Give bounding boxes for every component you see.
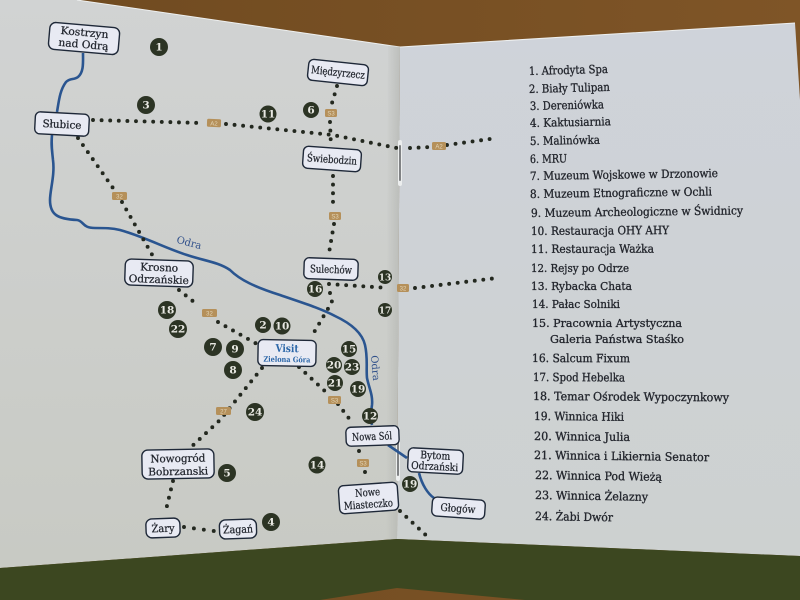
- point 22: 22: [171, 324, 185, 336]
- road 32 south: [179, 290, 257, 344]
- label Żagań: Żagań: [223, 521, 253, 537]
- label Visit Zielona Góra: Zielona Góra: [263, 355, 311, 364]
- point 9: 9: [231, 344, 239, 356]
- road badges: [112, 109, 446, 468]
- numbered points: [137, 38, 418, 531]
- road S3 middle: [329, 176, 334, 253]
- river Odra north: [57, 53, 83, 112]
- item 15 line 2: Galeria Państwa Staśko: [550, 332, 684, 346]
- label Nowe Miasteczko: Nowe: [355, 486, 381, 500]
- point 10: 10: [275, 320, 289, 332]
- badge 32 east: [397, 284, 409, 292]
- road Nowogród to Żary: [165, 481, 173, 514]
- item 8: 8. Muzeum Etnograficzne w Ochli: [530, 184, 712, 201]
- item 23: 23. Winnica Żelazny: [535, 488, 649, 504]
- item 10: 10. Restauracja OHY AHY: [531, 223, 669, 238]
- road A2 west: [93, 120, 202, 123]
- point 22: [169, 320, 187, 338]
- item 12: 12. Rejsy po Odrze: [531, 261, 629, 275]
- label Świebodzin: Świebodzin: [307, 150, 358, 168]
- item 9: 9. Muzeum Archeologiczne w Świdnicy: [531, 203, 743, 220]
- label Nowogród Bobrzański: Bobrzanski: [148, 465, 209, 479]
- label Bytom Odrzański: Bytom: [420, 449, 451, 463]
- road 27: [189, 368, 262, 449]
- point 23: 23: [345, 362, 359, 374]
- point 18: [158, 301, 176, 319]
- label Krosno Odrzańskie: Krosno: [140, 261, 178, 275]
- right page: [397, 23, 800, 556]
- road Żary to Żagań: [184, 527, 214, 531]
- road A2 east: [410, 139, 490, 148]
- badge 32 north: 32: [116, 194, 123, 200]
- point 11: [260, 106, 276, 122]
- label Bytom Odrzański: [407, 448, 464, 474]
- point 17: [378, 303, 392, 317]
- point 5: [218, 464, 236, 482]
- river Odra main: [50, 135, 372, 425]
- label Visit Zielona Góra: Visit: [275, 343, 299, 355]
- label Międzyrzecz: [307, 59, 369, 86]
- point 19: 19: [351, 384, 365, 396]
- badge S3 middle: [329, 212, 341, 220]
- road A2 centre: [226, 124, 397, 148]
- badge 32 south: [202, 309, 217, 318]
- point 6: 6: [307, 104, 315, 116]
- point 4: [262, 513, 280, 531]
- road S3 Nowa Sól to Nowe Miasteczko: [359, 451, 366, 480]
- green cover band: [0, 539, 800, 600]
- item 5: 5. Malinówka: [530, 133, 600, 148]
- left page: [0, 0, 400, 568]
- label Kostrzyn nad Odrą: Kostrzyn: [60, 25, 109, 41]
- badge S3 middle: S3: [331, 214, 339, 220]
- staple top: [398, 140, 402, 186]
- label Nowe Miasteczko: Miasteczko: [344, 497, 393, 513]
- road 32 east: [329, 278, 497, 288]
- badge A2 west: [207, 119, 221, 128]
- point 23: [344, 359, 360, 375]
- item 3: 3. Dereniówka: [530, 97, 604, 113]
- point 13: [378, 270, 392, 284]
- point 4: 4: [267, 516, 275, 528]
- label Międzyrzecz: Międzyrzecz: [310, 64, 366, 82]
- point 19: [350, 381, 366, 397]
- point 19 second: [402, 476, 418, 492]
- point 3: 3: [142, 100, 150, 112]
- badge S3 Nowa Sól: S3: [359, 462, 367, 468]
- label Żagań: [219, 519, 257, 539]
- label Świebodzin: [302, 146, 362, 172]
- point 1: 1: [155, 42, 163, 54]
- point 14: 14: [310, 460, 324, 472]
- point 15: 15: [342, 344, 356, 356]
- label Głogów: [431, 497, 486, 519]
- badge S3 south: [328, 396, 341, 404]
- point 24: 24: [248, 406, 262, 418]
- point 5: 5: [223, 468, 231, 480]
- badge S3 north: S3: [327, 112, 335, 118]
- point 12: 12: [363, 410, 377, 422]
- item 14: 14. Pałac Solniki: [532, 297, 620, 311]
- item 16: 16. Salcum Fixum: [532, 351, 630, 365]
- label Nowa Sól: Nowa Sól: [352, 430, 393, 444]
- label Krosno Odrzańskie: [125, 259, 193, 287]
- label Żary: [146, 518, 180, 538]
- point 19 second: 19: [403, 478, 417, 490]
- point 15: [341, 341, 357, 357]
- point 1: [150, 38, 168, 56]
- item 24: 24. Żabi Dwór: [535, 509, 614, 524]
- road south of Nowe Miasteczko: [400, 511, 429, 538]
- label Nowa Sól: [346, 426, 399, 446]
- point 9: [226, 340, 244, 358]
- badge A2 west: A2: [210, 121, 218, 128]
- road S3 south of Visit: [299, 367, 351, 421]
- item 20: 20. Winnica Julia: [534, 429, 630, 444]
- point 11: 11: [261, 108, 275, 120]
- point 6: [303, 102, 319, 118]
- badge A2 east: A2: [435, 144, 443, 150]
- point 14: [308, 456, 326, 474]
- point 17: 17: [379, 306, 391, 316]
- point 13: 13: [379, 274, 391, 284]
- label Nowogród Bobrzański: [142, 449, 214, 479]
- point 12: [362, 408, 378, 424]
- label Kostrzyn nad Odrą: nad Odrą: [58, 37, 109, 53]
- item 15 line 1: 15. Pracownia Artystyczna: [532, 316, 682, 330]
- point 10: [274, 318, 290, 334]
- item 19: 19. Winnica Hiki: [534, 409, 624, 424]
- point 16: [307, 281, 323, 297]
- badge 32 north: [112, 192, 127, 200]
- item 7: 7. Muzeum Wojskowe w Drzonowie: [530, 166, 718, 183]
- road 32 north: [78, 138, 154, 258]
- item 22: 22. Winnica Pod Wieżą: [535, 468, 662, 484]
- point 7: 7: [209, 342, 217, 354]
- badge 27: 27: [220, 410, 227, 416]
- badge S3 north: [325, 109, 337, 118]
- item 13: 13. Rybacka Chata: [531, 279, 632, 293]
- item 11: 11. Restauracja Ważka: [531, 242, 654, 256]
- point 2: 2: [259, 320, 267, 332]
- fold shadow: [386, 45, 400, 540]
- item 17: 17. Spod Hebelka: [533, 370, 625, 384]
- staple bottom: [396, 427, 400, 481]
- label Nowe Miasteczko: [338, 482, 399, 514]
- point 21: 21: [328, 378, 342, 390]
- point 20: 20: [327, 360, 341, 372]
- label Słubice: [34, 112, 90, 136]
- badge S3 south: S3: [331, 398, 339, 404]
- page edge highlight: [77, 0, 795, 47]
- point 7: [204, 338, 222, 356]
- item 18: 18. Temar Ośrodek Wypoczynkowy: [533, 389, 730, 404]
- label Krosno Odrzańskie: Odrzańskie: [129, 273, 189, 287]
- point 20: [326, 357, 342, 373]
- label Bytom Odrzański: Odrzański: [411, 460, 459, 474]
- point 21: [327, 375, 343, 391]
- river label Odra vertical: Odra: [368, 355, 381, 381]
- item 4: 4. Kaktusiarnia: [530, 114, 611, 130]
- road S3 north: [330, 86, 337, 147]
- point 18: 18: [160, 304, 174, 316]
- label Visit Zielona Góra: [258, 339, 316, 367]
- label Głogów: Głogów: [440, 502, 476, 516]
- item 2: 2. Biały Tulipan: [529, 80, 611, 96]
- item 21: 21. Winnica i Likiernia Senator: [534, 448, 710, 464]
- city labels: [34, 22, 486, 539]
- label Nowogród Bobrzański: Nowogród: [150, 453, 206, 465]
- label Słubice: Słubice: [42, 118, 82, 132]
- label Żary: Żary: [151, 521, 175, 535]
- label Kostrzyn nad Odrą: [48, 22, 120, 55]
- point 2: [255, 317, 271, 333]
- point 3: [137, 96, 155, 114]
- item 6: 6. MRU: [530, 151, 567, 166]
- point 24: [246, 403, 264, 421]
- label Sulechów: Sulechów: [310, 263, 352, 277]
- point 16: 16: [308, 284, 322, 296]
- list of places: [529, 62, 743, 524]
- badge 32 south: 32: [206, 312, 213, 318]
- badge A2 east: [432, 142, 446, 150]
- road Sulechów to Visit: [313, 293, 332, 334]
- label Sulechów: [304, 258, 358, 280]
- river Odra south: [388, 445, 434, 498]
- river label Odra: Odra: [175, 235, 203, 252]
- badge 32 east: 32: [400, 286, 407, 292]
- badge S3 Nowa Sól: [357, 459, 369, 468]
- item 1: 1. Afrodyta Spa: [529, 62, 608, 78]
- point 8: 8: [229, 364, 237, 376]
- badge 27: [216, 407, 231, 416]
- point 8: [224, 361, 242, 379]
